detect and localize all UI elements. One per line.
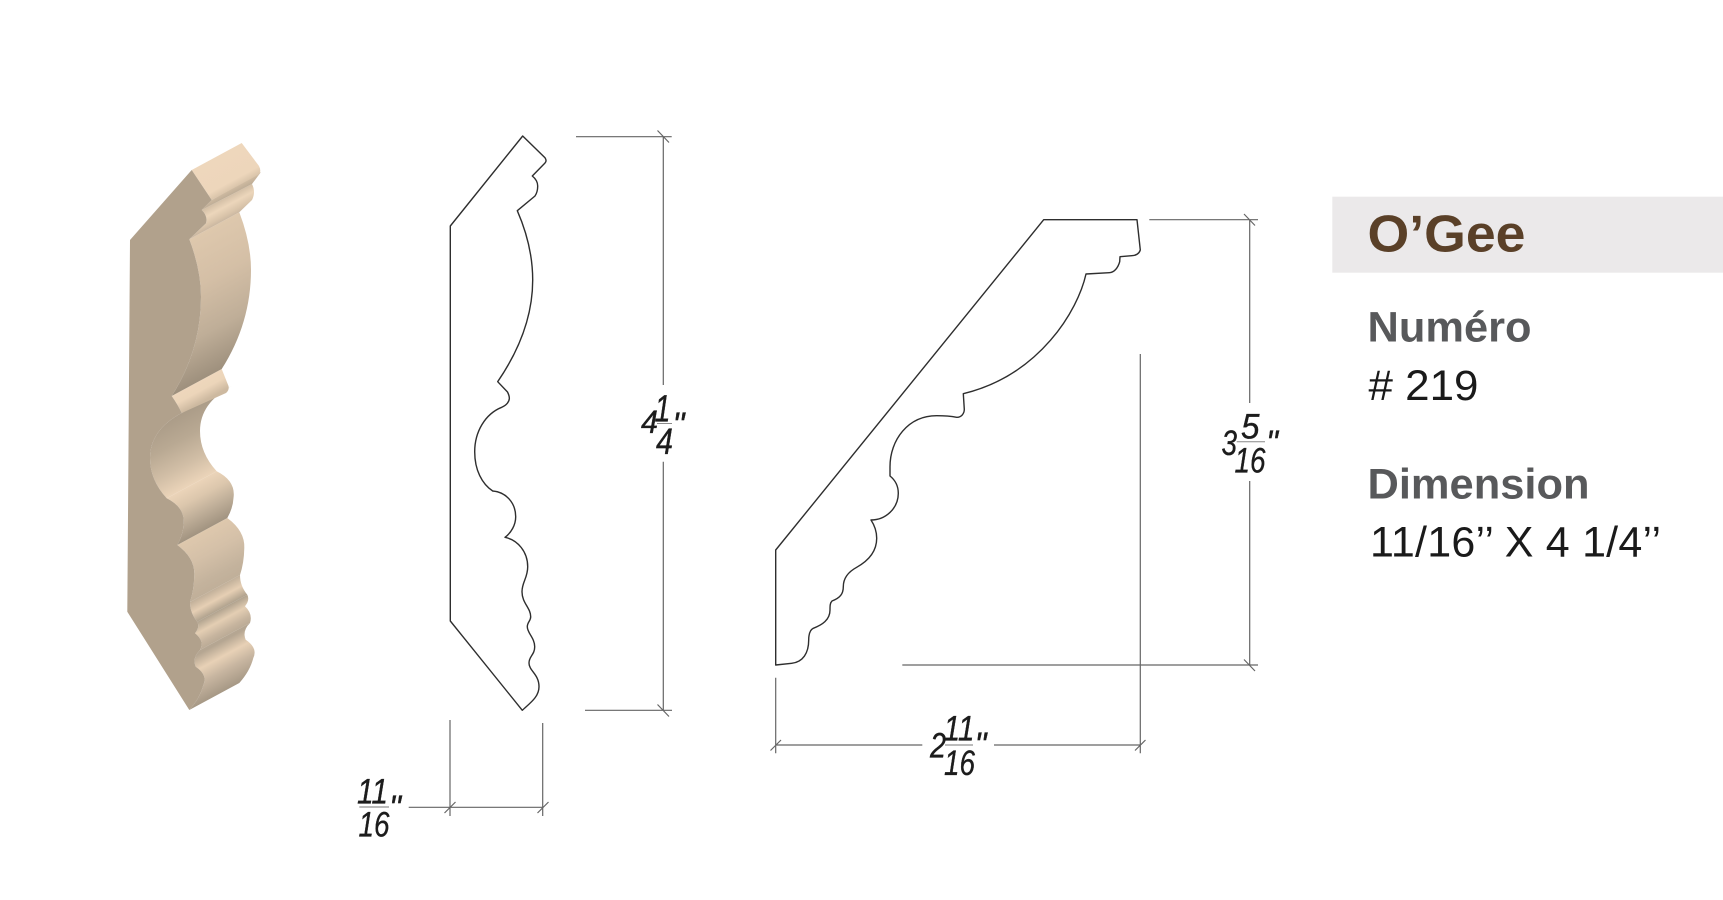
label 3 5/16 inch: 16 — [1234, 442, 1266, 481]
label 3 5/16 inch: 3 — [1222, 424, 1237, 463]
label 3 5/16 inch — [1222, 407, 1280, 481]
label 2 11/16 inch: 16 — [944, 744, 975, 783]
heading: Dimension: Dimension — [1368, 460, 1590, 508]
3D moulding rendering — [127, 143, 261, 710]
label 11/16 inch: 16 — [358, 806, 390, 845]
heading: Numéro: Numéro — [1368, 304, 1532, 352]
dimension block — [1368, 460, 1661, 567]
title band — [1332, 197, 1723, 273]
label 4 1/4 inch: 4 — [641, 404, 658, 440]
label 2 11/16 inch: 2 — [929, 726, 946, 765]
title: O'Gee: O’Gee — [1368, 206, 1526, 264]
angled profile drawing — [776, 220, 1140, 665]
height dimension 3 5/16 — [1149, 214, 1280, 671]
label 4 1/4 inch: 1 — [654, 388, 670, 430]
label 2 11/16 inch — [929, 710, 988, 783]
label 2 11/16 inch: 11 — [944, 710, 974, 749]
label 3 5/16 inch: 5 — [1241, 407, 1260, 446]
vertical profile drawing — [450, 136, 546, 710]
value: # 219: # 219 — [1368, 362, 1478, 410]
label 11/16 inch: " — [389, 789, 403, 828]
label 4 1/4 inch: 4 — [656, 421, 673, 462]
width dimension 11/16 — [357, 720, 548, 845]
moulding end face — [127, 170, 212, 710]
height dimension 4 1/4 — [576, 130, 686, 716]
label 4 1/4 inch — [641, 388, 686, 462]
label 11/16 inch: 11 — [357, 772, 388, 811]
value: 11/16 X 4 1/4: 11/16’’ X 4 1/4’’ — [1370, 519, 1661, 567]
label 3 5/16 inch: " — [1266, 424, 1280, 463]
width dimension 2 11/16 — [770, 354, 1258, 783]
product number block — [1368, 304, 1532, 410]
label 2 11/16 inch: " — [974, 726, 988, 765]
label 11/16 inch — [357, 772, 403, 845]
label 4 1/4 inch: " — [672, 406, 686, 445]
